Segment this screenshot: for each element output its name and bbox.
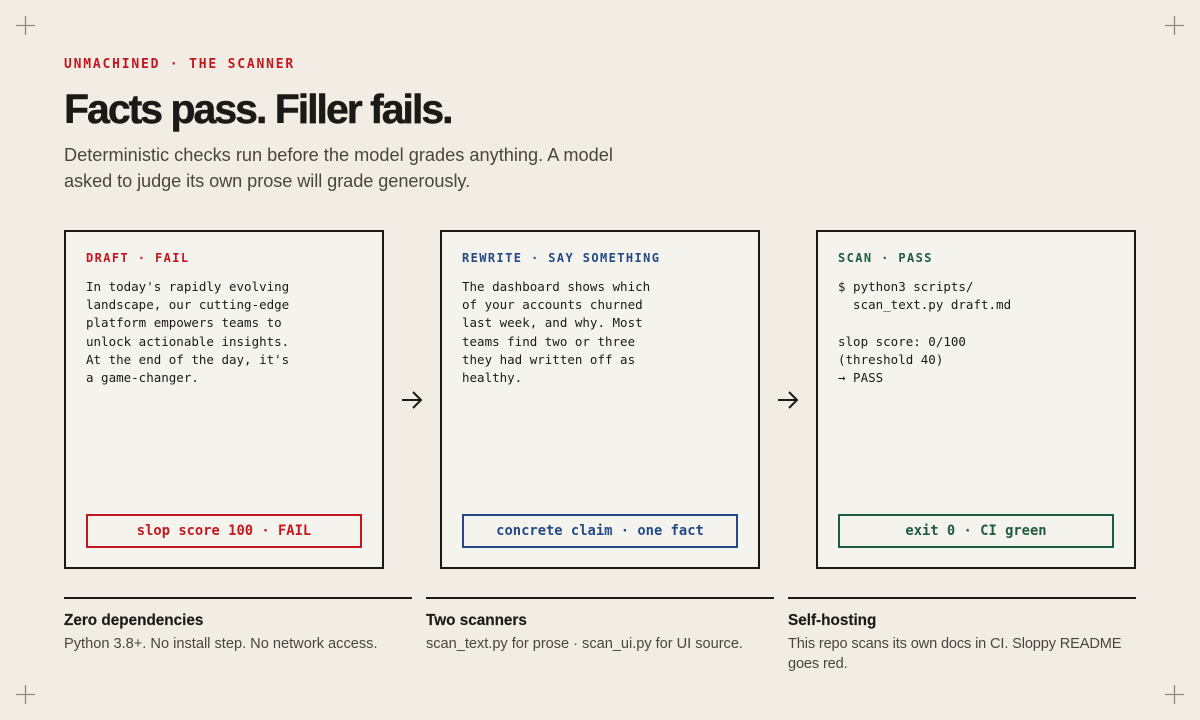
badge: slop score xyxy=(86,514,362,548)
footer heading: zero dependencies: Zero dependencies xyxy=(64,612,203,629)
footer heading: self-hosting: Self-hosting xyxy=(788,612,876,629)
arrow: rewrite to scan xyxy=(778,391,798,409)
panel: rewrite xyxy=(440,230,760,569)
icon: crop mark top right xyxy=(1165,16,1184,35)
icon: crop mark top left xyxy=(16,16,35,35)
panel: draft fail xyxy=(64,230,384,569)
badge: exit 0 xyxy=(838,514,1114,548)
text: scan output: $ python3 scripts/ scan_text.py draft.md slop score: 0/100 (threshold 40) → PASS xyxy=(838,279,1011,385)
title: Facts pass. Filler fails. xyxy=(64,86,452,132)
badge: exit 0: exit 0 · CI green xyxy=(905,523,1047,539)
label: scan: SCAN · PASS xyxy=(838,251,933,265)
footer column: two scanners xyxy=(426,597,774,652)
icon: crop mark bottom right xyxy=(1165,685,1184,704)
panel: scan pass xyxy=(816,230,1136,569)
text: rewrite copy: The dashboard shows which of your accounts churned last week, and why. Most teams find two or three they had written off as healthy. xyxy=(462,279,650,385)
footer column: zero dependencies xyxy=(64,597,412,652)
footer text: self-hosting: This repo scans its own docs in CI. Sloppy README goes red. xyxy=(788,636,1121,672)
icon: crop mark bottom left xyxy=(16,685,35,704)
label: draft: DRAFT · FAIL xyxy=(86,251,190,265)
badge: concrete claim: concrete claim · one fact xyxy=(496,523,704,539)
footer text: zero dependencies: Python 3.8+. No install step. No network access. xyxy=(64,636,378,652)
subtitle: Deterministic checks run before the model grades anything. A model asked to judge its own prose will grade generously. xyxy=(64,145,613,191)
eyebrow: UNMACHINED · THE SCANNER xyxy=(64,57,295,72)
badge: slop score: slop score 100 · FAIL xyxy=(137,523,311,539)
label: rewrite: REWRITE · SAY SOMETHING xyxy=(462,251,660,265)
text: draft copy: In today's rapidly evolving landscape, our cutting-edge platform empowers teams to unlock actionable insights. At the end of the day, it's a game-changer. xyxy=(86,279,289,385)
footer column: self-hosting xyxy=(788,597,1136,672)
badge: concrete claim xyxy=(462,514,738,548)
arrow: draft to rewrite xyxy=(402,391,422,409)
footer text: two scanners: scan_text.py for prose · scan_ui.py for UI source. xyxy=(426,636,743,652)
footer heading: two scanners: Two scanners xyxy=(426,612,527,629)
